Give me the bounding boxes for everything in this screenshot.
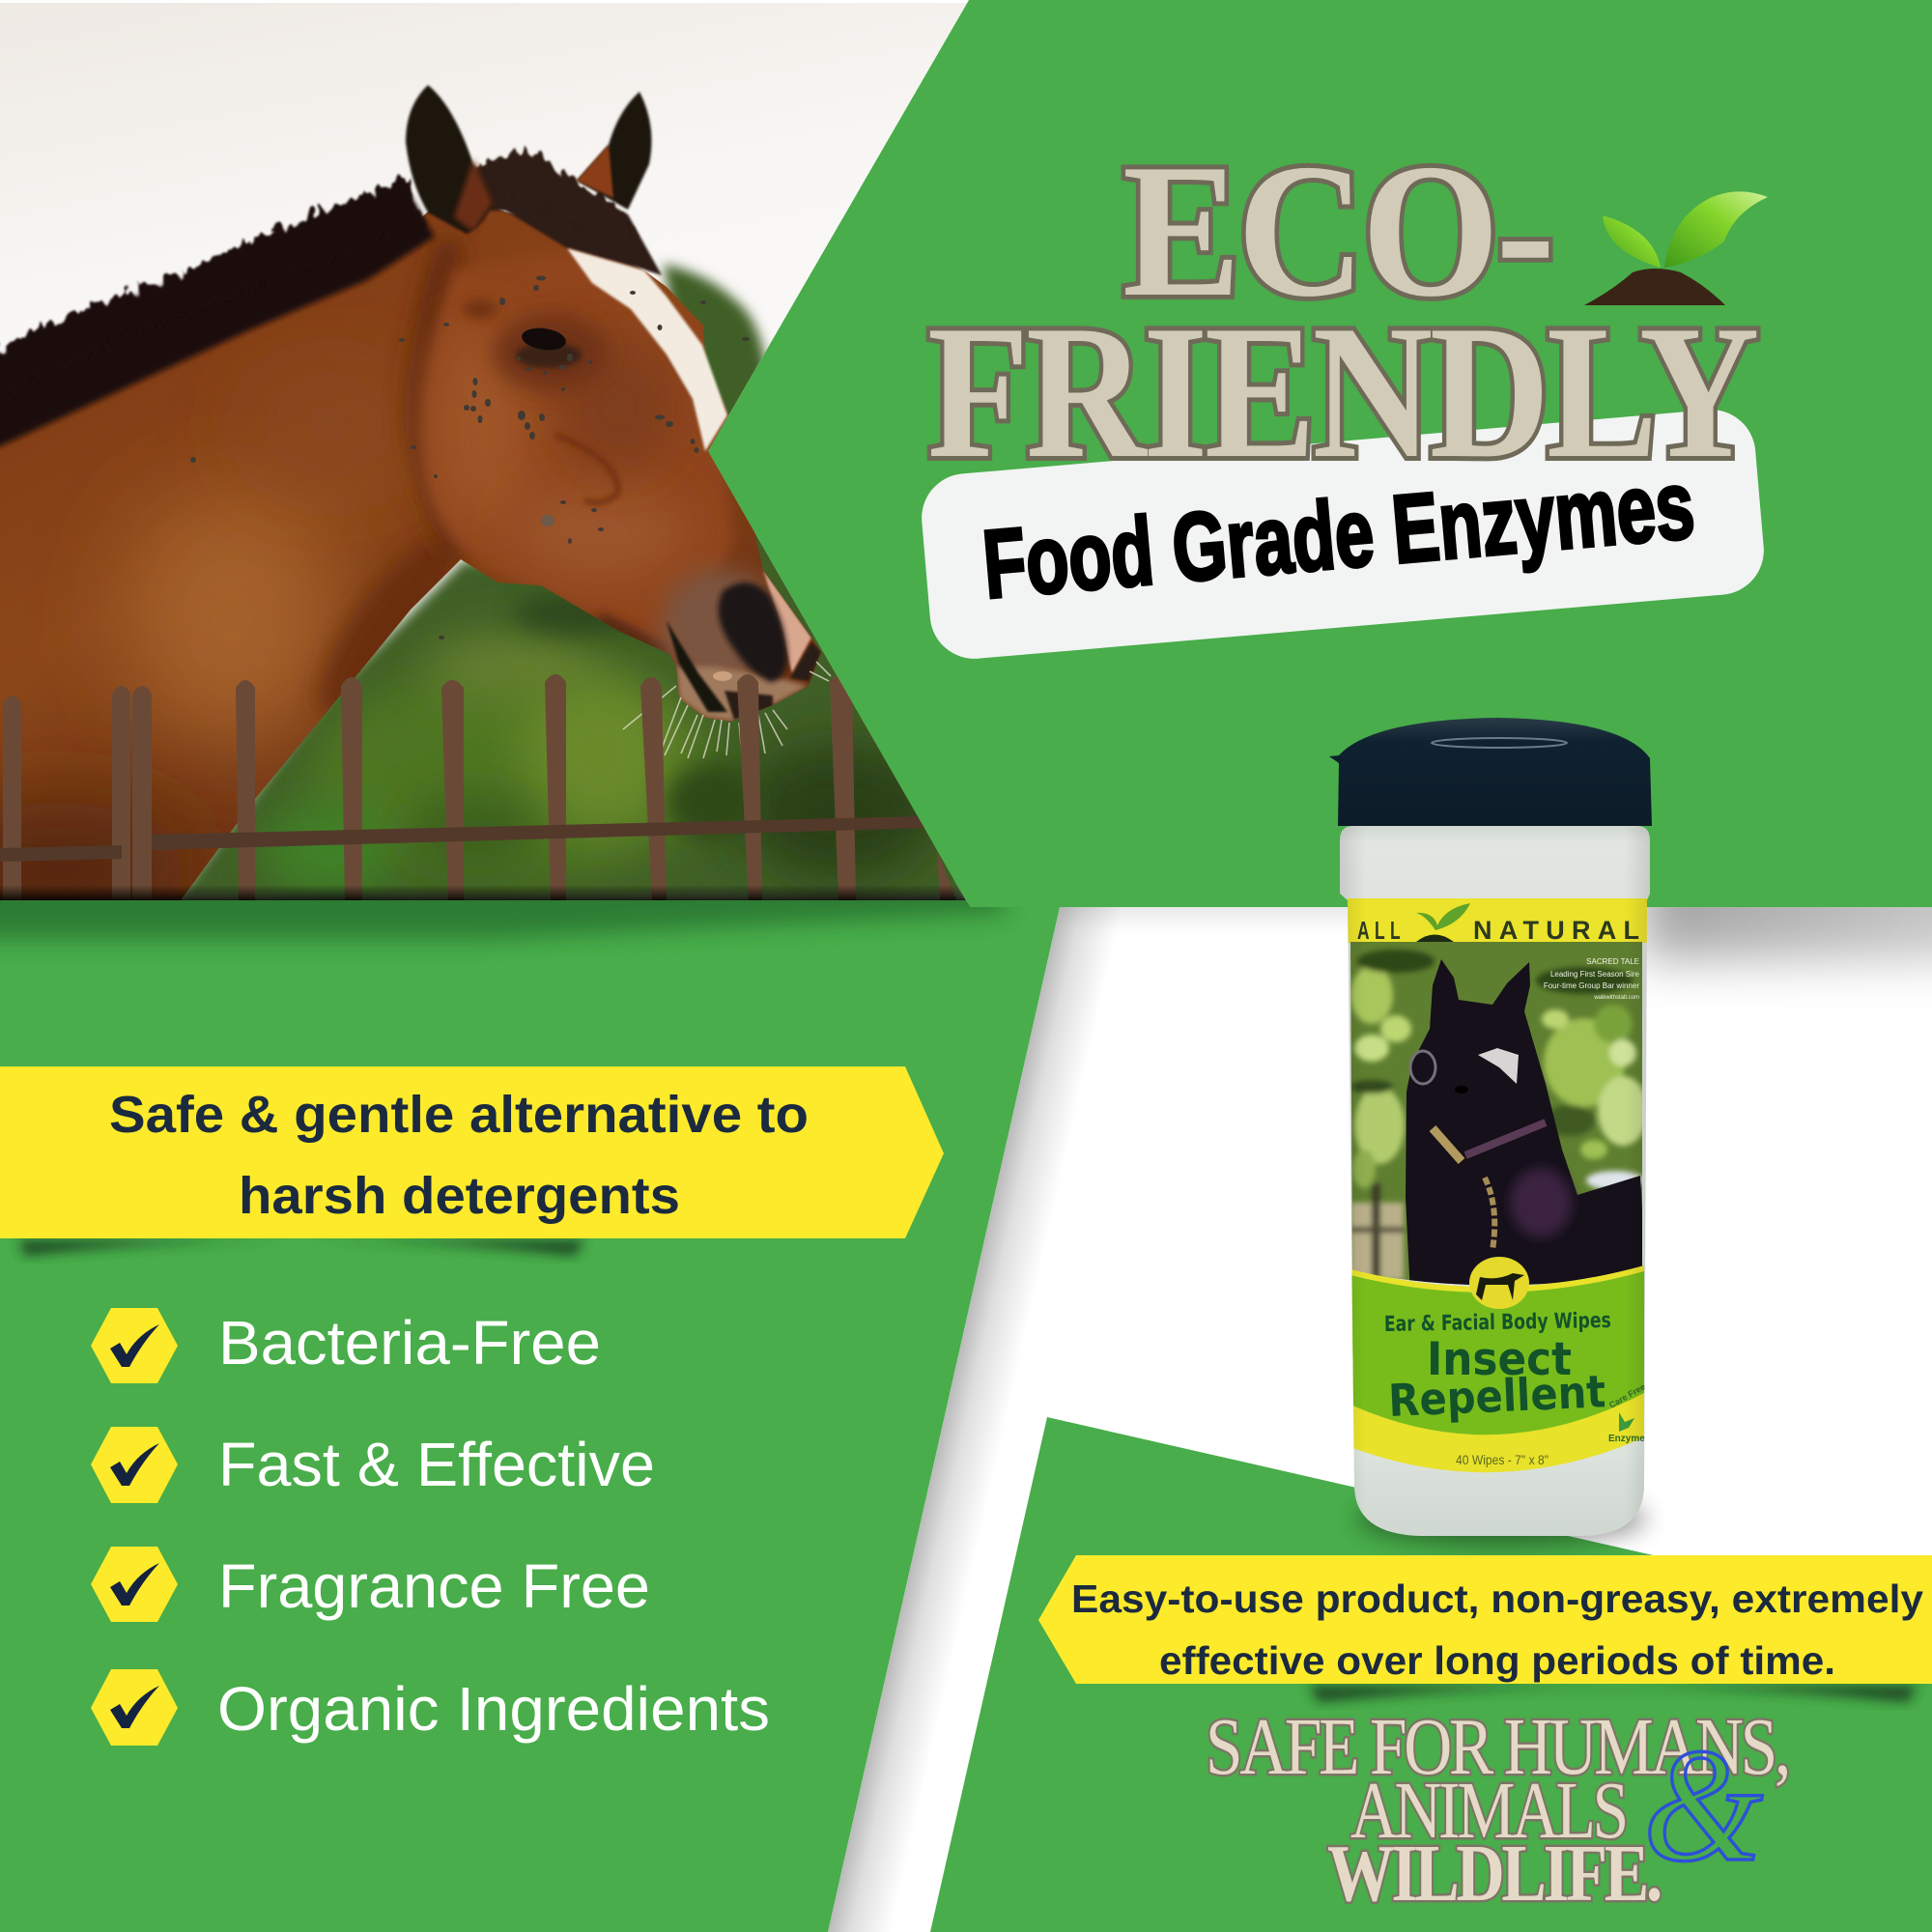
label: all natural band xyxy=(1348,898,1647,945)
checklist item: bacteria-free xyxy=(91,1308,601,1383)
eye xyxy=(516,326,582,368)
small caption on photo xyxy=(1544,957,1640,1001)
panel: top green shape xyxy=(708,0,1932,907)
title words xyxy=(927,125,1757,497)
checklist item: fragrance free: Fragrance Free xyxy=(218,1551,650,1621)
label: all natural band: NATURAL xyxy=(1473,916,1639,945)
heading: safe for humans, animals and wildlife: WILDLIFE. xyxy=(1327,1829,1661,1918)
label: product name: Ear & Facial Body Wipes xyxy=(1384,1309,1611,1337)
jar body xyxy=(1333,821,1657,1546)
checklist item: bacteria-free: Bacteria-Free xyxy=(218,1308,601,1378)
flies on the face xyxy=(190,276,750,639)
heading: safe for humans, animals and wildlife: SAFE FOR HUMANS, xyxy=(1206,1702,1788,1792)
callout: safe and gentle banner xyxy=(0,1066,944,1256)
panel: lower left green shape xyxy=(0,869,1060,1932)
ears xyxy=(406,85,651,234)
callout: easy to use banner: effective over long periods of time. xyxy=(1159,1638,1835,1683)
checklist item: fast and effective: Fast & Effective xyxy=(218,1430,655,1499)
white blaze xyxy=(567,248,727,451)
panel: lower right green shape xyxy=(930,1417,1932,1932)
label: small enzymes logo: Care Free xyxy=(1607,1381,1647,1410)
checklist item: organic ingredients: Organic Ingredients xyxy=(217,1674,770,1744)
jar lid xyxy=(1329,718,1652,826)
icon: sprout xyxy=(1584,191,1768,305)
heading: safe for humans, animals and wildlife xyxy=(1206,1702,1788,1918)
title words: ECO- xyxy=(1122,125,1551,336)
whiskers xyxy=(623,662,831,758)
checklist item: fast and effective xyxy=(91,1427,655,1503)
subtitle pill xyxy=(918,406,1768,663)
label: product name xyxy=(1384,1309,1611,1427)
label: small enzymes logo xyxy=(1607,1381,1651,1444)
panel: horse photograph xyxy=(0,0,976,937)
trees behind the horse xyxy=(174,264,966,900)
blue ampersand: & xyxy=(1643,1716,1763,1895)
mane xyxy=(0,150,662,459)
title: eco-friendly with subtitle pill xyxy=(918,125,1768,663)
label: yellow and green lower wrap xyxy=(1350,1257,1644,1472)
jar shadow xyxy=(1357,1492,1647,1546)
label: small enzymes logo: Enzymes xyxy=(1608,1434,1651,1444)
iron fence xyxy=(0,674,966,900)
callout: safe and gentle banner: Safe & gentle alternative to xyxy=(109,1086,809,1144)
label: product name: Insect xyxy=(1427,1333,1572,1386)
label: product name: Repellent xyxy=(1387,1365,1606,1427)
small caption on photo: SACRED TALE xyxy=(1586,957,1639,966)
label: wipes count: 40 Wipes - 7" x 8" xyxy=(1456,1452,1548,1467)
label: photo of black horse xyxy=(1348,942,1648,1294)
small caption on photo: Four-time Group Bar winner xyxy=(1544,981,1639,990)
white background panel with soft shadows xyxy=(828,907,1932,1932)
heading: safe for humans, animals and wildlife: ANIMALS xyxy=(1350,1766,1626,1856)
callout: easy to use banner xyxy=(1038,1555,1932,1702)
title words: FRIENDLY xyxy=(927,286,1757,497)
horse neck and head xyxy=(0,193,821,937)
callout: safe and gentle banner: harsh detergents xyxy=(239,1167,680,1225)
callout: easy to use banner: Easy-to-use product, non-greasy, extremely xyxy=(1071,1577,1923,1621)
small caption on photo: Leading First Season Sire xyxy=(1550,970,1640,979)
label: all natural band: ALL xyxy=(1357,916,1406,945)
product jar xyxy=(1329,718,1657,1546)
small caption on photo: walkwithstalt.com xyxy=(1593,995,1639,1001)
